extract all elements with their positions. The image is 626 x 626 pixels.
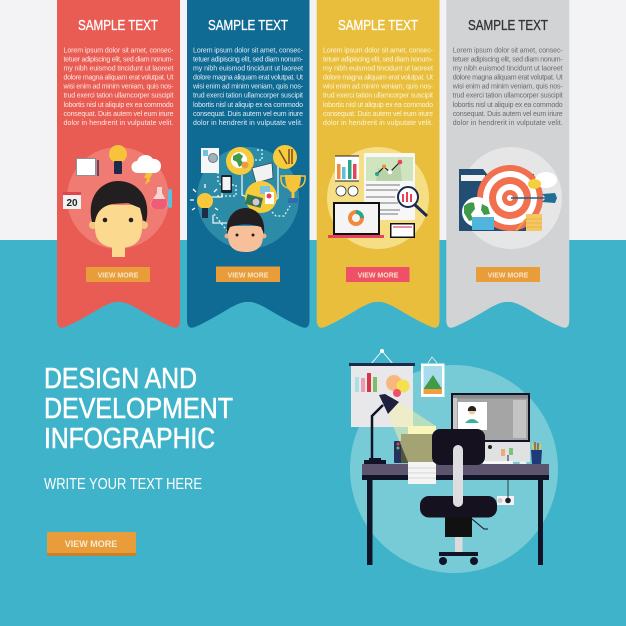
button: red panel view more: VIEW MORE [98,272,139,280]
text block: grey panel: lobortis nisl ut aliquip ex ea commodo [453,102,563,109]
text block: blue panel: dolore magna aliquam erat volutpat. Ut [193,75,303,82]
desk items [483,448,526,465]
icon: flask and test tube [151,187,172,209]
icon: camera and photos badge [245,181,277,213]
poster with chart [349,349,415,427]
icon: globe badge [226,147,254,175]
text block: blue panel: dolor in hendrerit in vulputate velit. [193,120,303,127]
icon: calendar [63,192,81,209]
text block: red panel: trud exerci tation ullamcorper suscipit [64,93,174,100]
icon: calendar: 20 [66,198,78,209]
main title [44,363,233,455]
text block: red panel: lobortis nisl ut aliquip ex ea commodo [64,102,174,109]
icon: document with magnifier [201,148,219,173]
main title: DEVELOPMENT [44,393,233,425]
illustration: office desk [349,349,558,573]
main title: DESIGN AND [44,363,197,395]
text block: yellow panel: dolor in hendrerit in vulputate velit. [323,120,433,127]
icon: cloud and lightning [131,155,161,185]
panel: grey ribbon [446,0,569,328]
text block: grey panel [452,48,563,127]
text block: grey panel: tetuer adipiscing elit, sed diam nonum- [453,56,563,64]
icon: light bulb [109,145,127,174]
icon circle: red panel [67,147,169,249]
text block: yellow panel: trud exerci tation ullamcorper suscipit [323,93,433,100]
icon: idea bulb with rays [190,184,218,218]
icon: bar chart card [335,156,359,182]
button: main view more: VIEW MORE [65,539,117,549]
framed picture [421,357,444,397]
heading: grey panel: SAMPLE TEXT [468,17,548,34]
heading: yellow panel: SAMPLE TEXT [338,17,418,34]
main title: INFOGRAPHIC [44,423,215,455]
text block: red panel: consequat. Duis autem vel eum iriure [64,111,174,118]
teal background [0,240,626,626]
office chair [420,429,497,565]
heading: red panel: SAMPLE TEXT [78,17,158,34]
text block: grey panel: Lorem ipsum dolor sit amet, consec- [453,48,563,54]
text block: grey panel: dolor in hendrerit in vulputate velit. [453,120,563,127]
panel: blue ribbon [187,0,310,328]
button: red panel view more [86,267,150,282]
lamp [364,394,399,464]
text block: yellow panel: my nibh euismod tincidunt ut laoreet [323,66,433,72]
text block: blue panel: tetuer adipiscing elit, sed diam nonum- [193,56,304,64]
text block: yellow panel: lobortis nisl ut aliquip ex ea commodo [323,102,433,109]
button: grey panel view more [476,267,540,282]
text block: blue panel: Lorem ipsum dolor sit amet, consec- [193,48,304,54]
text block: red panel [62,48,174,127]
icon: arrow in target [511,193,557,203]
backdrop circle [350,365,558,573]
text block: blue panel: trud exerci tation ullamcorper suscipit [193,93,303,100]
text block: red panel: tetuer adipiscing elit, sed diam nonum- [64,56,174,64]
icon: laptop [328,202,384,238]
text block: yellow panel: tetuer adipiscing elit, sed diam nonum- [323,56,434,64]
icon: trophy [281,175,305,203]
button: blue panel view more: VIEW MORE [228,272,269,280]
icon: folder [459,169,534,231]
text block: blue panel: my nibh euismod tincidunt ut laoreet [193,66,303,72]
text block: grey panel: dolore magna aliquam erat volutpat. Ut [453,75,563,82]
text block: yellow panel: Lorem ipsum dolor sit amet, consec- [323,48,434,54]
text block: red panel: wisi enim ad minim veniam, quis nos- [62,84,174,91]
icon: report document [364,153,415,220]
text block: yellow panel [322,48,434,127]
icon: cloud and note [528,172,557,189]
icon: target [477,165,543,231]
icon: pencils badge [273,145,297,169]
icon: tablet [390,223,415,238]
panel: yellow ribbon [317,0,440,328]
text block: blue panel: consequat. Duis autem vel eum iriure [193,111,303,118]
button: blue panel view more [216,266,280,282]
icon: phone [221,175,232,193]
icon circle: yellow panel [327,147,429,249]
text block: grey panel: trud exerci tation ullamcorper suscipit [453,93,563,100]
text block: grey panel: my nibh euismod tincidunt ut laoreet [453,66,563,72]
icon: globe [462,197,492,227]
text block: yellow panel: wisi enim ad minim veniam, quis nos- [322,84,434,91]
button: main view more [47,532,136,556]
monitor [451,393,530,462]
pen cup [531,442,542,464]
icon: credit card [472,217,494,230]
text block: red panel: my nibh euismod tincidunt ut laoreet [64,66,174,72]
button: yellow panel view more: VIEW MORE [358,272,399,280]
text block: blue panel: wisi enim ad minim veniam, quis nos- [192,84,304,91]
icon: glasses [336,186,358,196]
text block: red panel: Lorem ipsum dolor sit amet, consec- [64,48,174,54]
icon: magnifier [398,187,427,216]
text block: blue panel [192,48,304,127]
icon: notepad and pencil [516,214,542,231]
desk [362,464,549,565]
printer with light beam [388,402,437,463]
button: yellow panel view more [346,267,410,282]
subtitle: WRITE YOUR TEXT HERE [44,476,202,493]
heading: blue panel: SAMPLE TEXT [208,17,288,34]
icon: open book [252,163,273,183]
text block: yellow panel: consequat. Duis autem vel eum iriure [323,111,433,118]
printed paper [408,462,436,484]
text block: red panel: dolor in hendrerit in vulputate velit. [64,120,174,127]
text block: red panel: dolore magna aliquam erat volutpat. Ut [64,75,174,82]
icon: character head [89,181,148,257]
power outlet and cord [497,480,514,505]
button: grey panel view more: VIEW MORE [488,272,529,280]
icon: book [76,158,99,176]
text block: yellow panel: dolore magna aliquam erat volutpat. Ut [323,75,433,82]
icon circle: blue panel [197,147,299,249]
icon circle: grey panel [460,147,562,249]
text block: grey panel: wisi enim ad minim veniam, quis nos- [452,84,563,91]
panel: red ribbon [57,0,180,328]
text block: grey panel: consequat. Duis autem vel eum iriure [453,111,563,118]
icon: boy head [224,208,266,252]
text block: blue panel: lobortis nisl ut aliquip ex ea commodo [193,102,303,109]
connector lines [205,150,290,232]
